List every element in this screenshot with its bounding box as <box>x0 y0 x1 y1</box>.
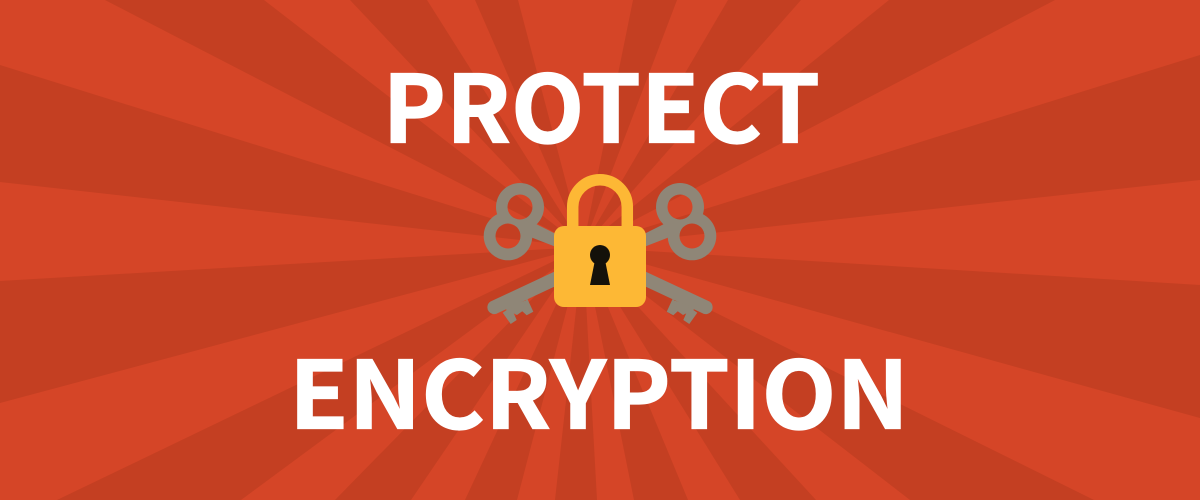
icon: padlock shackle <box>573 180 627 230</box>
icon: upper right key <box>640 183 716 260</box>
icon: padlock body <box>554 226 646 307</box>
icon: keyhole <box>590 245 610 285</box>
title: PROTECT: PROTECT <box>382 35 820 170</box>
icon: crossed keys and padlock <box>484 180 716 324</box>
icon: upper left key <box>484 183 560 260</box>
icon: lower left key <box>487 269 560 324</box>
title: ENCRYPTION: ENCRYPTION <box>289 321 909 456</box>
icon: lower right key <box>640 269 713 324</box>
